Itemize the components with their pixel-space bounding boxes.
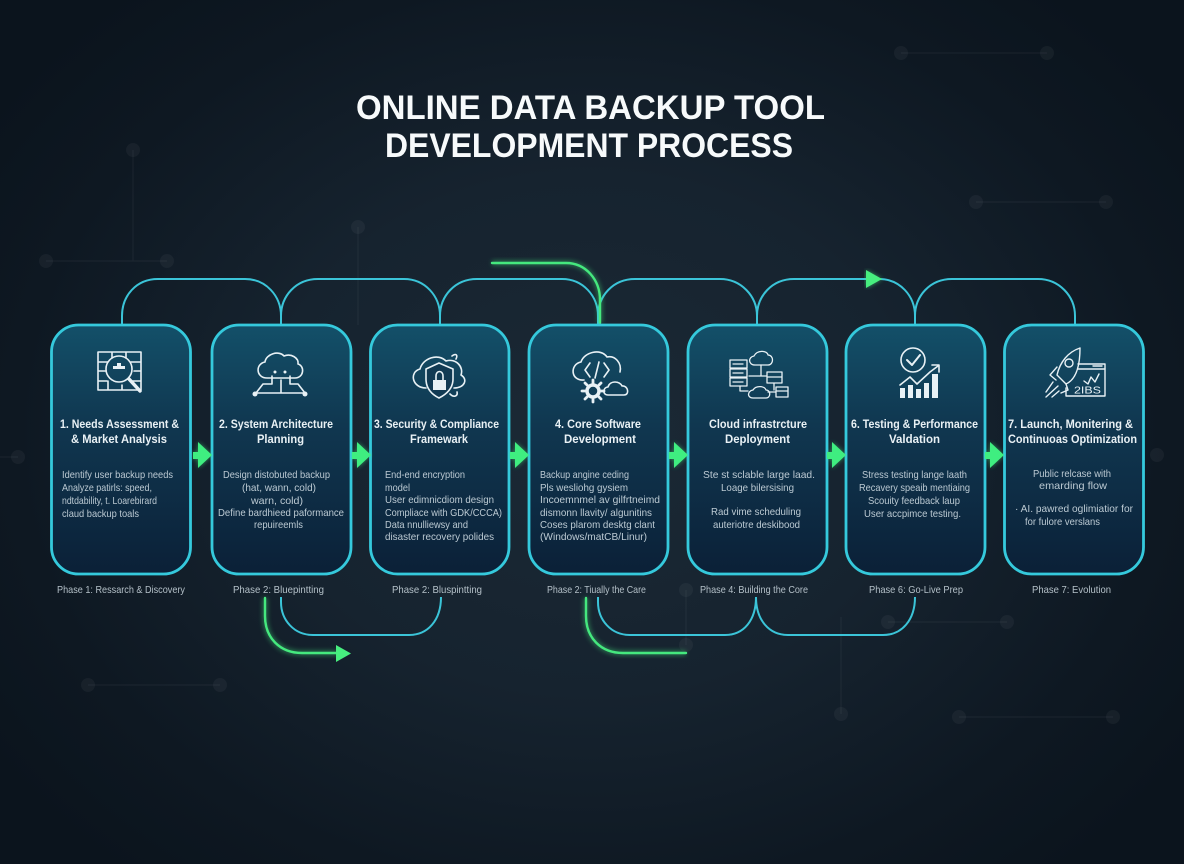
heading: 7. Launch, Monitering & bbox=[1008, 417, 1133, 431]
body text bbox=[62, 469, 173, 520]
bottom connector arcs bbox=[281, 597, 915, 635]
body text: auteriotre deskibood bbox=[713, 519, 800, 531]
body text: warn, cold) bbox=[250, 495, 303, 507]
card 7: launch and monitoring bbox=[1004, 325, 1144, 574]
heading: Valdation bbox=[889, 432, 940, 446]
body text: Compliace with GDK/CCCA) bbox=[385, 507, 502, 519]
title: ONLINE DATA BACKUP TOOL bbox=[356, 89, 825, 127]
body text: disaster recovery polides bbox=[385, 531, 494, 543]
green flow arrow: top left bbox=[492, 263, 600, 323]
arrow: card 4 to 5 bbox=[669, 442, 688, 468]
heading: 1. Needs Assessment & bbox=[60, 417, 179, 431]
card 5: cloud infrastructure bbox=[688, 325, 827, 574]
body text: Define bardhieed paformance bbox=[218, 507, 344, 519]
heading bbox=[219, 417, 333, 446]
arrow: card 6 to 7 bbox=[985, 442, 1004, 468]
arrow: card 2 to 3 bbox=[352, 442, 371, 468]
icon: rocket and dashboard bbox=[1046, 348, 1105, 397]
phase label 3: Phase 2: Bluspintting bbox=[392, 584, 482, 596]
body text: Stress testing lange laath bbox=[862, 469, 967, 481]
icon: check and rising bars bbox=[900, 348, 939, 398]
body text: for fulore verslans bbox=[1025, 516, 1100, 528]
heading bbox=[1008, 417, 1137, 446]
phase label 7: Phase 7: Evolution bbox=[1032, 584, 1111, 596]
icon: grid and magnifier bbox=[98, 352, 141, 391]
body text: emarding flow bbox=[1039, 480, 1107, 492]
faint circuit decoration bbox=[0, 46, 1164, 724]
body text: model bbox=[385, 482, 410, 494]
heading: Continuoas Optimization bbox=[1008, 432, 1137, 446]
body text bbox=[703, 469, 815, 531]
title: DEVELOPMENT PROCESS bbox=[385, 127, 793, 165]
body text: Ste st sclable large laad. bbox=[703, 469, 815, 481]
body text: Pls wesliohg gysiem bbox=[540, 482, 628, 494]
arrow: card 5 to 6 bbox=[827, 442, 846, 468]
heading bbox=[60, 417, 179, 446]
body text: · AI. pawred oglimiatior for bbox=[1015, 503, 1133, 515]
heading: Cloud infrastrcture bbox=[709, 417, 807, 431]
icon: servers and clouds bbox=[730, 351, 788, 398]
phase label 5: Phase 4: Building the Core bbox=[700, 584, 808, 596]
body text: User accpimce testing. bbox=[864, 508, 961, 520]
body text: Backup angine ceding bbox=[540, 469, 629, 481]
card 3: security and compliance bbox=[370, 325, 509, 574]
body text: End-end encryption bbox=[385, 469, 465, 481]
heading: Development bbox=[564, 432, 636, 446]
heading: & Market Analysis bbox=[71, 432, 167, 446]
icon: cloud circuit bbox=[252, 353, 308, 396]
phase label 2: Phase 2: Bluepintting bbox=[233, 584, 324, 596]
heading bbox=[555, 417, 641, 446]
body text: User edimnicdiom design bbox=[385, 494, 494, 506]
card 2: system architecture bbox=[212, 325, 351, 574]
icon: cloud shield lock bbox=[413, 355, 465, 398]
heading: 4. Core Software bbox=[555, 417, 641, 431]
body text: Coses plarom desktg clant bbox=[540, 519, 655, 531]
title bbox=[356, 89, 825, 165]
body text bbox=[218, 469, 344, 531]
phase label 1: Phase 1: Ressarch & Discovery bbox=[57, 584, 186, 596]
heading: 6. Testing & Performance bbox=[851, 417, 978, 431]
arrow: card 1 to 2 bbox=[193, 442, 212, 468]
phase label 6: Phase 6: Go-Live Prep bbox=[869, 584, 963, 596]
body text: Recavery speaib mentiaing bbox=[859, 482, 970, 494]
card 4: core software bbox=[529, 325, 668, 574]
body text: Identify user backup needs bbox=[62, 469, 173, 481]
body text: Incoemnmel av gilfrtneimd bbox=[540, 494, 660, 506]
body text: Scouity feedback laup bbox=[868, 495, 960, 507]
body text: ndtdability, t. Loarebirard bbox=[62, 495, 157, 507]
top connector arcs bbox=[122, 279, 1075, 324]
heading: Planning bbox=[257, 432, 304, 446]
body text bbox=[385, 469, 502, 543]
body text: Design distobuted backup bbox=[223, 469, 330, 481]
green flow arrow: bottom centre bbox=[586, 598, 686, 653]
heading bbox=[374, 417, 499, 446]
card 6: testing and performance bbox=[846, 325, 985, 574]
green flow arrow: bottom left bbox=[265, 598, 351, 662]
body text: claud backup toals bbox=[62, 508, 139, 520]
green flow arrow: top right head bbox=[866, 270, 882, 288]
arrow: card 3 to 4 bbox=[510, 442, 529, 468]
heading: Deployment bbox=[725, 432, 790, 446]
body text: dismonn llavity/ algunitins bbox=[540, 507, 652, 519]
body text: Analyze patirls: speed, bbox=[62, 482, 152, 494]
body text bbox=[1015, 468, 1133, 528]
body text bbox=[540, 469, 660, 543]
body text: Public relcase with bbox=[1033, 468, 1111, 480]
heading: Framewark bbox=[410, 432, 468, 446]
icon label: 2IBS bbox=[1074, 386, 1101, 396]
body text: Loage bilersising bbox=[721, 482, 794, 494]
body text: (Windows/matCB/Linur) bbox=[540, 531, 647, 543]
card 1: needs assessment bbox=[52, 325, 190, 574]
phase label 4: Phase 2: Tiually the Care bbox=[547, 584, 646, 596]
heading: 2. System Architecture bbox=[219, 417, 333, 431]
body text: Rad vime scheduling bbox=[711, 506, 801, 518]
body text: Data nnulliewsy and bbox=[385, 519, 468, 531]
icon: cloud code gear bbox=[573, 352, 628, 402]
heading bbox=[851, 417, 978, 446]
body text: repuireemls bbox=[254, 519, 303, 531]
body text bbox=[859, 469, 970, 520]
heading bbox=[709, 417, 807, 446]
heading: 3. Security & Compliance bbox=[374, 417, 499, 431]
body text: (hat, wann, cold) bbox=[242, 482, 316, 494]
